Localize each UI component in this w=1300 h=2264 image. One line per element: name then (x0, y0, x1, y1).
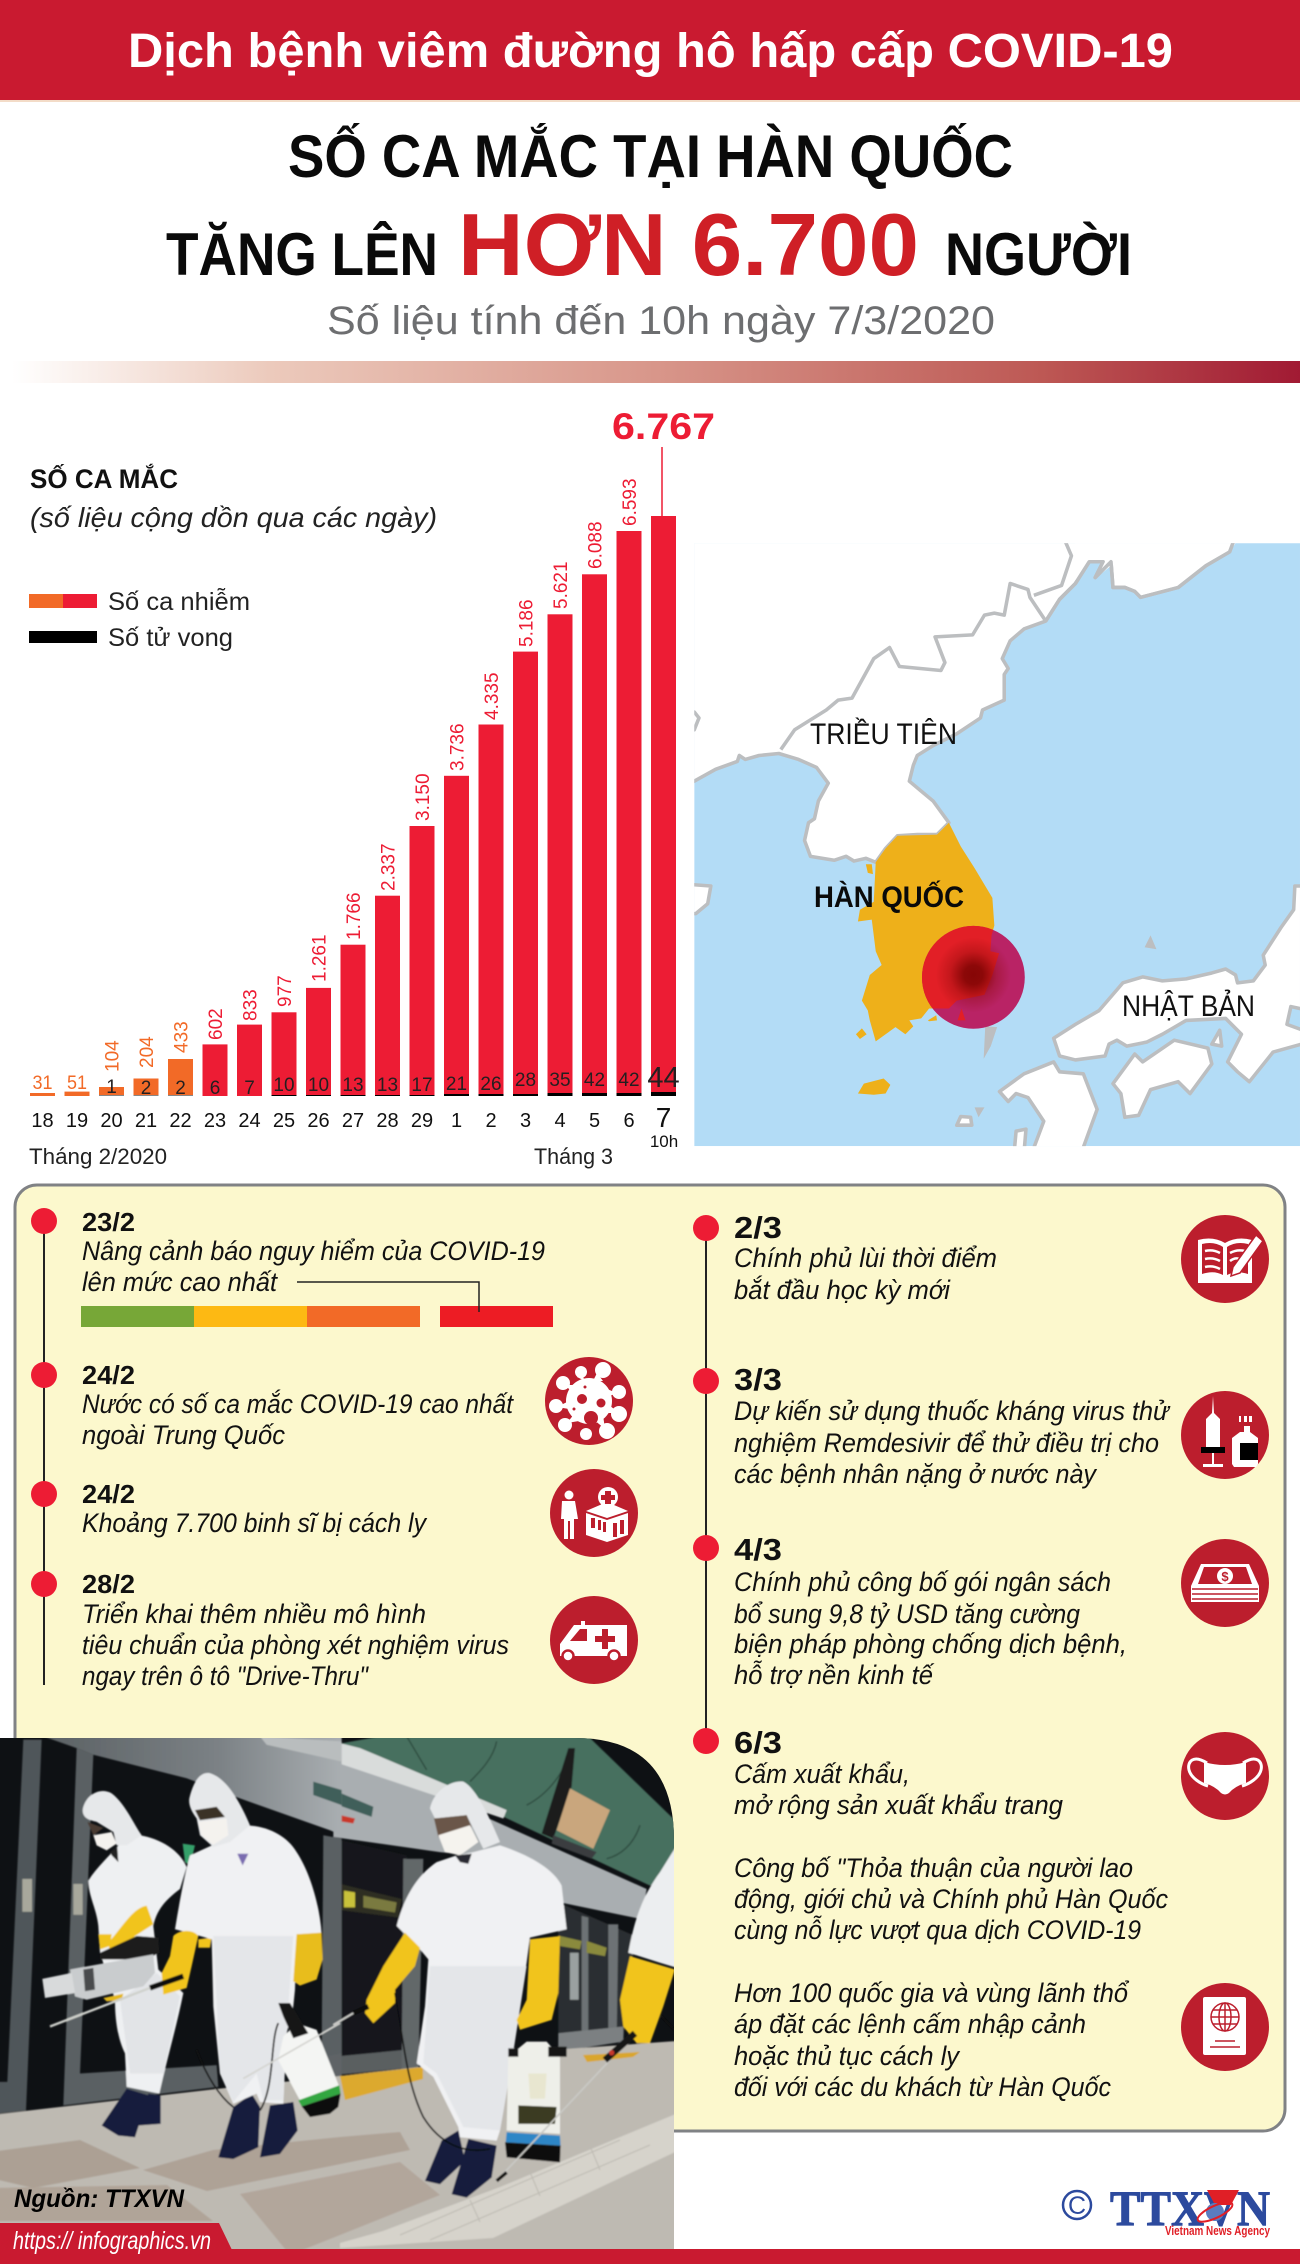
date axis: 6 (623, 1110, 635, 1132)
event 6/3: mở rộng sản xuất khẩu trang (734, 1790, 1063, 1820)
case count labels: 104 (102, 1040, 124, 1072)
case count labels: 5.621 (551, 561, 572, 609)
event 28/2 (82, 1569, 509, 1691)
event 28/2: ngay trên ô tô "Drive-Thru" (82, 1661, 369, 1691)
chart legend (29, 587, 250, 652)
event 6/3: đối với các du khách từ Hàn Quốc (734, 2072, 1111, 2102)
event 4/3: hỗ trợ nền kinh tế (734, 1659, 935, 1690)
map label: South Korea: HÀN QUỐC (814, 880, 964, 914)
case count labels: 6.593 (620, 478, 641, 526)
worker 1 (42, 1791, 187, 2137)
date axis: 24 (238, 1110, 261, 1132)
logo: TTXVN: C (1068, 2192, 1086, 2220)
event 6/3: áp đặt các lệnh cấm nhập cảnh (734, 2009, 1086, 2039)
event 2/3: 2/3 (734, 1210, 782, 1245)
death count labels: 6 (210, 1078, 220, 1099)
event 24/2 soldiers quarantined (82, 1479, 427, 1538)
event 23/2: 23/2 (82, 1207, 135, 1237)
title: NGƯỜI (945, 221, 1132, 288)
event 3/3 (734, 1362, 1171, 1489)
worker 3 (333, 1781, 610, 2198)
timeline rail: right column (693, 1215, 719, 1754)
date axis: 3 (520, 1110, 531, 1132)
chart heading: (số liệu cộng dồn qua các ngày) (30, 502, 437, 533)
case count labels: 833 (240, 989, 262, 1021)
event 28/2: 28/2 (82, 1569, 135, 1599)
case count labels: 4.335 (482, 672, 503, 720)
death count labels: 42 (618, 1070, 640, 1091)
event 4/3: biện pháp phòng chống dịch bệnh, (734, 1629, 1127, 1659)
case count labels (32, 478, 641, 1094)
icon: passport (1181, 1983, 1269, 2071)
title: HƠN 6.700 (458, 195, 919, 294)
case count labels: 204 (137, 1036, 158, 1068)
source credit: Nguồn: TTXVN (14, 2185, 185, 2213)
event 23/2 (81, 1207, 553, 1327)
date axis: 20 (100, 1110, 123, 1132)
event 2/3: Chính phủ lùi thời điểm (734, 1243, 997, 1273)
event 24/2 highest cases: Nước có số ca mắc COVID-19 cao nhất (82, 1388, 514, 1419)
date axis: 29 (411, 1110, 433, 1132)
death count labels: 21 (446, 1074, 467, 1095)
icon: money stack (1181, 1539, 1269, 1627)
event 6/3: động, giới chủ và Chính phủ Hàn Quốc (734, 1884, 1168, 1914)
event 24/2 soldiers quarantined: 24/2 (82, 1479, 135, 1509)
timeline rail: left column (31, 1208, 57, 1685)
date axis: 23 (204, 1110, 226, 1132)
event 3/3: các bệnh nhân nặng ở nước này (734, 1459, 1097, 1489)
map label: Japan: NHẬT BẢN (1122, 989, 1255, 1023)
worker 2 (150, 1773, 341, 2159)
date axis: 19 (66, 1110, 88, 1132)
logo: TTXVN (1063, 2180, 1271, 2238)
icon: syringe and medicine bottle (1181, 1391, 1269, 1479)
event 6/3: Công bố "Thỏa thuận của người lao (734, 1853, 1133, 1883)
date axis: 25 (273, 1110, 295, 1132)
case count labels: 31 (32, 1073, 52, 1094)
date axis: 2 (485, 1110, 497, 1132)
photo left half: platform doors (0, 1736, 342, 2114)
death count labels: 44 (647, 1062, 680, 1094)
icon: soldier and hospital (550, 1469, 638, 1557)
case count labels: 3.150 (413, 773, 434, 821)
death count labels: 17 (411, 1075, 433, 1096)
alert level scale (81, 1282, 553, 1327)
case count labels: 5.186 (516, 599, 538, 647)
date axis: 4 (554, 1110, 566, 1132)
event 24/2 highest cases: 24/2 (82, 1360, 135, 1390)
footer bar (0, 2223, 1300, 2264)
map label: North Korea: TRIỀU TIÊN (810, 717, 957, 751)
date axis: Tháng 3 (534, 1144, 613, 1169)
title (166, 123, 1132, 294)
event 4/3 (734, 1532, 1127, 1690)
event 6/3: cùng nỗ lực vượt qua dịch COVID-19 (734, 1914, 1141, 1945)
event 6/3: Hơn 100 quốc gia và vùng lãnh thổ (734, 1978, 1130, 2008)
death count labels: 42 (584, 1070, 605, 1091)
gradient divider bar (12, 361, 1300, 383)
event 4/3: 4/3 (734, 1532, 782, 1567)
event 3/3: Dự kiến sử dụng thuốc kháng virus thử (734, 1396, 1171, 1426)
death count labels: 13 (342, 1075, 364, 1096)
death count labels: 10 (308, 1075, 329, 1096)
title: TĂNG LÊN (166, 221, 438, 288)
event 23/2: lên mức cao nhất (82, 1267, 278, 1297)
event 24/2 soldiers quarantined: Khoảng 7.700 binh sĩ bị cách ly (82, 1508, 427, 1538)
date axis: 28 (376, 1110, 399, 1132)
date axis: 21 (135, 1110, 157, 1132)
event 6/3 (734, 1725, 1168, 2102)
death count labels: 26 (480, 1074, 502, 1095)
logo: TTXVN: TTXVN (1110, 2180, 1270, 2236)
case count labels: 1.261 (310, 934, 330, 982)
event 28/2: tiêu chuẩn của phòng xét nghiệm virus (82, 1630, 509, 1660)
death count labels: 2 (175, 1078, 186, 1099)
chart heading (30, 462, 437, 533)
logo: TTXVN: Vietnam News Agency (1165, 2223, 1271, 2238)
date axis (29, 1102, 678, 1169)
death count labels: 13 (377, 1075, 398, 1096)
date axis: 22 (169, 1110, 192, 1132)
event 6/3: hoặc thủ tục cách ly (734, 2041, 960, 2071)
footer bar: https:// infographics.vn (13, 2227, 211, 2255)
title: SỐ CA MẮC TẠI HÀN QUỐC (288, 123, 1013, 190)
callout: latest total: 6.767 (612, 406, 715, 447)
header banner: Dịch bệnh viêm đường hô hấp cấp COVID-19 (128, 25, 1173, 78)
chart heading: SỐ CA MẮC (30, 462, 178, 494)
event 2/3: bắt đầu học kỳ mới (734, 1274, 951, 1305)
date axis: 26 (307, 1110, 330, 1132)
date axis: Tháng 2/2020 (29, 1144, 167, 1169)
event 4/3: bổ sung 9,8 tỷ USD tăng cường (734, 1599, 1080, 1629)
case count labels: 2.337 (378, 843, 400, 891)
worker 4 (605, 1845, 677, 2060)
case count labels: 977 (275, 975, 296, 1007)
date axis: 5 (589, 1110, 600, 1132)
icon: book and pencil (1181, 1215, 1269, 1303)
death count labels: 35 (549, 1070, 571, 1091)
event 6/3: Cấm xuất khẩu, (734, 1759, 910, 1789)
chart legend: Số tử vong (108, 624, 233, 652)
chart legend: Số ca nhiễm (108, 587, 250, 616)
case count labels: 1.766 (344, 892, 365, 940)
death count labels: 10 (273, 1075, 295, 1096)
map: Korean peninsula (684, 536, 1300, 1153)
icon: virus (545, 1357, 633, 1445)
photo right half: platform, worker 3 and worker 4 (333, 1736, 677, 2075)
icon: face mask (1181, 1732, 1269, 1820)
event 2/3 (734, 1210, 997, 1305)
event 3/3: nghiệm Remdesivir để thử điều trị cho (734, 1428, 1159, 1458)
panel: timeline (15, 1185, 1285, 2131)
death count labels: 1 (106, 1077, 117, 1098)
icon: ambulance (550, 1596, 638, 1684)
event 6/3: 6/3 (734, 1725, 782, 1760)
date axis: 7 (656, 1102, 671, 1133)
photo: workers disinfecting a subway platform (0, 1736, 690, 2264)
case count labels: 602 (206, 1008, 227, 1040)
case count labels: 6.088 (586, 521, 606, 569)
date axis: 18 (31, 1110, 54, 1132)
event 28/2: Triển khai thêm nhiều mô hình (82, 1599, 426, 1629)
callout: latest total (612, 406, 715, 516)
event 24/2 highest cases (82, 1360, 514, 1450)
case count labels: 433 (172, 1021, 192, 1053)
death count labels: 7 (244, 1078, 255, 1099)
icon: money stack: $ (1221, 1569, 1229, 1584)
photo: platform floor (0, 2040, 690, 2264)
date axis: 10h (650, 1132, 678, 1151)
death count labels: 2 (141, 1078, 151, 1099)
header banner (0, 0, 1300, 102)
case count labels: 51 (67, 1073, 87, 1094)
event 4/3: Chính phủ công bố gói ngân sách (734, 1567, 1111, 1597)
event 24/2 highest cases: ngoài Trung Quốc (82, 1420, 285, 1450)
event 3/3: 3/3 (734, 1362, 782, 1397)
subtitle: Số liệu tính đến 10h ngày 7/3/2020 (327, 299, 995, 343)
date axis: 27 (342, 1110, 364, 1132)
bar chart: cumulative cases (29, 406, 715, 1169)
death count labels (106, 1062, 680, 1099)
date axis: 1 (451, 1110, 462, 1132)
case count labels: 3.736 (448, 723, 468, 771)
event 23/2: Nâng cảnh báo nguy hiểm của COVID-19 (82, 1236, 545, 1266)
death count labels: 28 (515, 1070, 536, 1091)
